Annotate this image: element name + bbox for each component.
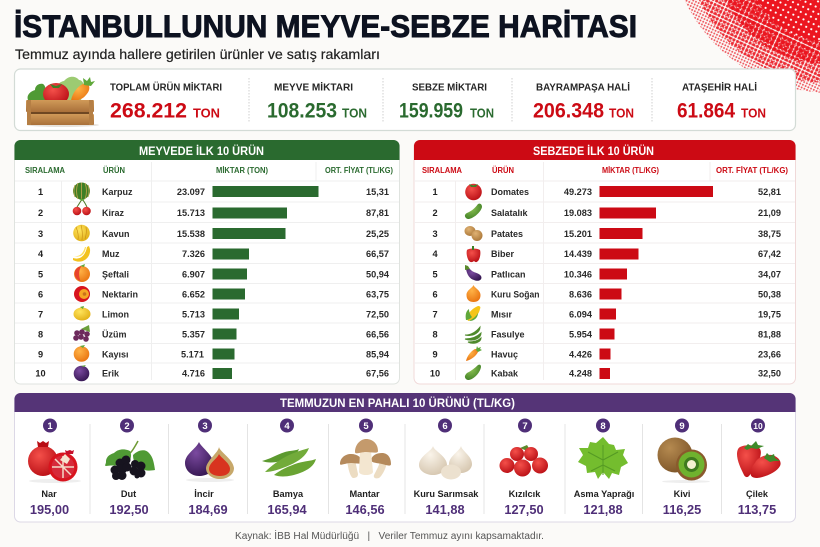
row: Patates [432,226,781,241]
KPI: total [110,80,222,122]
row: Fasulye: 5.954 [569,330,593,340]
KPI: total: 268.212 [110,98,187,122]
KPI: Bayrampaşa: BAYRAMPAŞA HALİ [536,80,630,94]
column headers: vegetables: SIRALAMA [422,166,462,175]
item: Bamya: 165,94 [267,502,307,517]
row: Mısır: 6.094 [569,310,593,320]
item: Nar: 1 [47,421,53,432]
item: Mantar: 146,56 [345,502,385,517]
column headers: vegetables [422,166,788,175]
row: Üzüm [38,325,389,342]
row: Kavun: Kavun [102,229,130,239]
row: Limon: 72,50 [366,310,389,320]
item: Kivi [658,418,710,517]
row: Kuru Soğan: Kuru Soğan [491,290,540,300]
row: Şeftali: 6.907 [182,270,205,280]
row: Erik: 67,56 [366,368,389,378]
item: Kızılcık: 127,50 [504,502,544,517]
row: Erik: 10 [35,368,46,378]
item: Kızılcık: Kızılcık [509,489,541,499]
item: Dut: 2 [124,421,130,432]
KPI: vegetable: 159.959 [399,98,463,122]
heading: vegetables [414,140,796,160]
row: Erik: Erik [102,368,120,378]
row: Kayısı [38,345,390,362]
row: Patates: 38,75 [758,229,781,239]
item: Mantar: 5 [363,421,369,432]
panel: top 10 vegetables [414,140,796,384]
item: Asma Yaprağı: 8 [600,421,606,432]
row: Domates: Domates [491,187,529,197]
row: Kiraz: 2 [38,208,43,218]
row: Şeftali: 50,94 [366,270,390,280]
row: Mısır [432,306,781,321]
item: Kızılcık: 7 [522,421,528,432]
row: Patlıcan: 5 [432,270,438,280]
column headers: fruit: ORT. FİYAT (TL/KG) [325,166,393,175]
item: Nar: 195,00 [30,502,69,517]
row: Domates: 49.273 [564,187,592,197]
row: Kabak: 10 [430,368,440,378]
item: Bamya [262,418,316,517]
subtitle: Temmuz ayında hallere getirilen ürünler ve satış rakamları [15,46,380,62]
row: Kuru Soğan: 8.636 [569,290,592,300]
item: Kivi: Kivi [674,489,690,499]
item: Mantar: Mantar [349,489,380,499]
row: Muz: 7.326 [182,249,205,259]
heading: most expensive [14,393,796,412]
row: Nektarin [38,286,389,302]
item: Kuru Sarımsak: 6 [442,421,448,432]
KPI: Ataşehir [677,80,766,122]
KPI: fruit [267,80,367,122]
KPI: Bayrampaşa: 206.348 [533,98,604,122]
row: Biber [432,246,781,262]
item: Nar: Nar [41,489,57,499]
item: Dut: 192,50 [109,502,149,517]
row: Salatalık: Salatalık [491,208,529,218]
column headers: fruit: SIRALAMA [25,166,65,175]
row: Kayısı: Kayısı [102,350,129,360]
row: Nektarin: 6 [38,290,43,300]
column headers: fruit [25,166,393,175]
row: Patlıcan: 34,07 [758,270,781,280]
row: Karpuz: 23.097 [177,187,205,197]
KPI: vegetable: SEBZE MİKTARI [412,80,487,94]
row: Biber: 14.439 [564,249,592,259]
item: Asma Yaprağı [574,418,634,517]
row: Kuru Soğan [432,285,781,302]
row: Biber: Biber [491,249,515,259]
row: Limon: Limon [102,310,129,320]
row: Üzüm: Üzüm [102,330,126,340]
item: Nar [28,418,81,517]
row: Havuç: 23,66 [758,350,781,360]
panel: KPI summary [14,69,796,130]
row: Patlıcan [432,265,781,281]
row: Mısır: Mısır [491,310,513,320]
row: Limon: 7 [38,310,43,320]
row: Üzüm: 8 [38,330,43,340]
KPI: Ataşehir: 61.864 [677,98,735,122]
row: Nektarin: 63,75 [366,290,389,300]
row: Kabak: 4.248 [569,368,592,378]
column headers: fruit: MİKTAR (TON) [216,166,268,175]
KPI: total: TOPLAM ÜRÜN MİKTARI [110,80,222,94]
row: Domates: 1 [432,187,438,197]
item: Kuru Sarımsak: 141,88 [425,502,465,517]
row: Kiraz: 15.713 [177,208,205,218]
KPI: Bayrampaşa [533,80,634,122]
row: Havuç: 9 [432,350,438,360]
KPI: vegetable: TON [470,106,494,120]
column headers: vegetables: ORT. FİYAT (TL/KG) [716,166,788,175]
item: Dut [105,418,155,517]
row: Havuç: Havuç [491,350,518,360]
row: Kuru Soğan: 6 [432,290,438,300]
column headers: vegetables: ÜRÜN [492,166,514,175]
KPI: Ataşehir: ATAŞEHİR HALİ [682,80,757,94]
heading: most expensive: TEMMUZUN EN PAHALI 10 ÜRÜNÜ (TL/KG) [280,397,515,410]
row: Limon [38,306,389,320]
row: Üzüm: 5.357 [182,330,205,340]
row: Kayısı: 5.171 [181,350,204,360]
row: Şeftali [38,264,390,282]
row: Kiraz: Kiraz [102,208,125,218]
row: Erik [35,365,389,381]
item: Kuru Sarımsak: Kuru Sarımsak [414,489,479,499]
row: Fasulye: Fasulye [491,330,525,340]
row: Biber: 67,42 [758,249,781,259]
row: Kiraz [38,199,389,218]
icon: produce crate [26,77,99,127]
row: Salatalık [432,204,781,219]
row: Kavun [38,225,389,241]
row: Şeftali: Şeftali [102,270,129,280]
row: Havuç: 4.426 [569,350,592,360]
heading: fruit [14,140,400,160]
row: Patates: Patates [491,229,523,239]
panel: top 10 fruit [14,140,400,384]
item: Çilek [737,418,781,517]
KPI: Ataşehir: TON [741,106,766,120]
item: Dut: Dut [121,489,136,499]
halftone sphere decoration [669,0,820,93]
KPI: Bayrampaşa: TON [609,106,634,120]
row: Karpuz: 1 [38,187,43,197]
row: Kiraz: 87,81 [366,208,389,218]
column headers: vegetables: MİKTAR (TL/KG) [602,166,659,175]
title: İSTANBULLUNUN MEYVE-SEBZE HARİTASI [14,8,637,44]
row: Fasulye [432,327,781,343]
row: Kayısı: 9 [38,350,43,360]
row: Salatalık: 19.083 [564,208,592,218]
row: Erik: 4.716 [182,368,205,378]
row: Muz: 4 [38,249,44,259]
heading: vegetables: SEBZEDE İLK 10 ÜRÜN [533,143,654,158]
KPI: fruit: TON [342,106,367,120]
item: Çilek: 10 [753,421,763,431]
item: İncir [185,418,234,517]
item: Kızılcık [500,418,548,517]
row: Havuç [432,346,781,361]
item: Kivi: 9 [679,421,685,432]
row: Limon: 5.713 [182,310,205,320]
item: İncir: İncir [194,489,214,499]
row: Karpuz [38,182,389,200]
row: Mısır: 7 [432,310,438,320]
KPI: total: TON [193,106,220,120]
row: Kuru Soğan: 50,38 [758,290,781,300]
row: Şeftali: 5 [38,270,43,280]
row: Muz [38,246,389,262]
item: Mantar [340,418,391,517]
item: Kivi: 116,25 [663,502,701,517]
item: İncir: 3 [202,421,208,432]
row: Kabak: 32,50 [758,368,781,378]
item: Çilek: Çilek [746,489,769,499]
row: Biber: 4 [432,249,438,259]
footer source note: Kaynak: İBB Hal Müdürlüğü | Veriler Temmuz ayını kapsamaktadır. [235,529,544,542]
KPI: fruit: MEYVE MİKTARI [274,80,353,94]
heading: fruit: MEYVEDE İLK 10 ÜRÜN [139,143,264,158]
item: Bamya: Bamya [273,489,304,499]
row: Üzüm: 66,56 [366,330,389,340]
row: Kayısı: 85,94 [366,350,390,360]
row: Kavun: 3 [38,229,43,239]
row: Salatalık: 21,09 [758,208,781,218]
row: Patates: 15.201 [564,229,592,239]
item: İncir: 184,69 [188,502,228,517]
item: Asma Yaprağı: Asma Yaprağı [574,489,634,499]
row: Patlıcan: Patlıcan [491,270,526,280]
row: Domates: 52,81 [758,187,781,197]
item: Asma Yaprağı: 121,88 [583,502,623,517]
row: Mısır: 19,75 [758,310,781,320]
row: Nektarin: 6.652 [182,290,205,300]
KPI: fruit: 108.253 [267,98,337,122]
row: Salatalık: 2 [432,208,438,218]
panel: most expensive 10 [14,393,796,522]
item: Kuru Sarımsak [414,418,479,517]
row: Kavun: 15.538 [177,229,205,239]
row: Kavun: 25,25 [366,229,389,239]
row: Fasulye: 8 [432,330,438,340]
row: Karpuz: Karpuz [102,187,133,197]
row: Kabak: Kabak [491,368,519,378]
row: Patlıcan: 10.346 [564,270,592,280]
row: Kabak [430,365,781,380]
row: Nektarin: Nektarin [102,290,138,300]
item: Çilek: 113,75 [738,502,776,517]
row: Patates: 3 [432,229,438,239]
row: Fasulye: 81,88 [758,330,781,340]
column headers: fruit: ÜRÜN [103,166,125,175]
KPI: vegetable [399,80,494,122]
row: Muz: Muz [102,249,120,259]
row: Domates [432,184,781,200]
row: Muz: 66,57 [366,249,389,259]
row: Karpuz: 15,31 [366,187,389,197]
item: Bamya: 4 [284,421,290,432]
